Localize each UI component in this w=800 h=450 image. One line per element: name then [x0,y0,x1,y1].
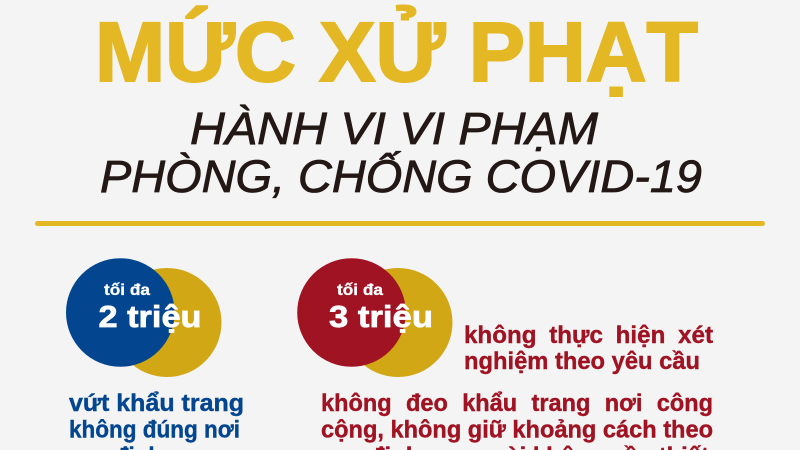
panel: 3 million fine [297,258,713,450]
fine amount label: tối đa [337,282,383,299]
violation text: masks and distancing [321,390,713,450]
icon: overlapping circles red and gold [297,258,452,377]
fine amount label: 3 triệu [329,299,433,334]
subtitle: PHÒNG, CHỐNG COVID-19 [100,151,702,202]
violation text: vứt khẩu trang [69,390,244,417]
violation text: testing: nghiệm theo yêu cầu [464,348,700,375]
violation text: masks and distancing: không đeo khẩu trang nơi công [321,390,713,417]
fine amount label: 2 triệu [98,299,202,334]
violation text [69,390,244,450]
violation text: masks and distancing: cộng, không giữ khoảng cách theo [321,416,713,444]
subtitle [100,103,702,202]
fine amount label [98,282,202,334]
fine amount label: tối đa [104,282,150,299]
subtitle: HÀNH VI VI PHẠM [190,103,599,154]
violation text: testing: không thực hiện xét [464,322,713,349]
fine amount label [329,282,433,334]
panel: 2 million fine [66,258,244,450]
icon: overlapping circles blue and gold [66,258,222,377]
violation text: testing [464,322,713,375]
violation text: không đúng nơi [69,416,240,444]
title: MỨC XỬ PHẠT [95,5,698,99]
divider bar [35,221,765,226]
